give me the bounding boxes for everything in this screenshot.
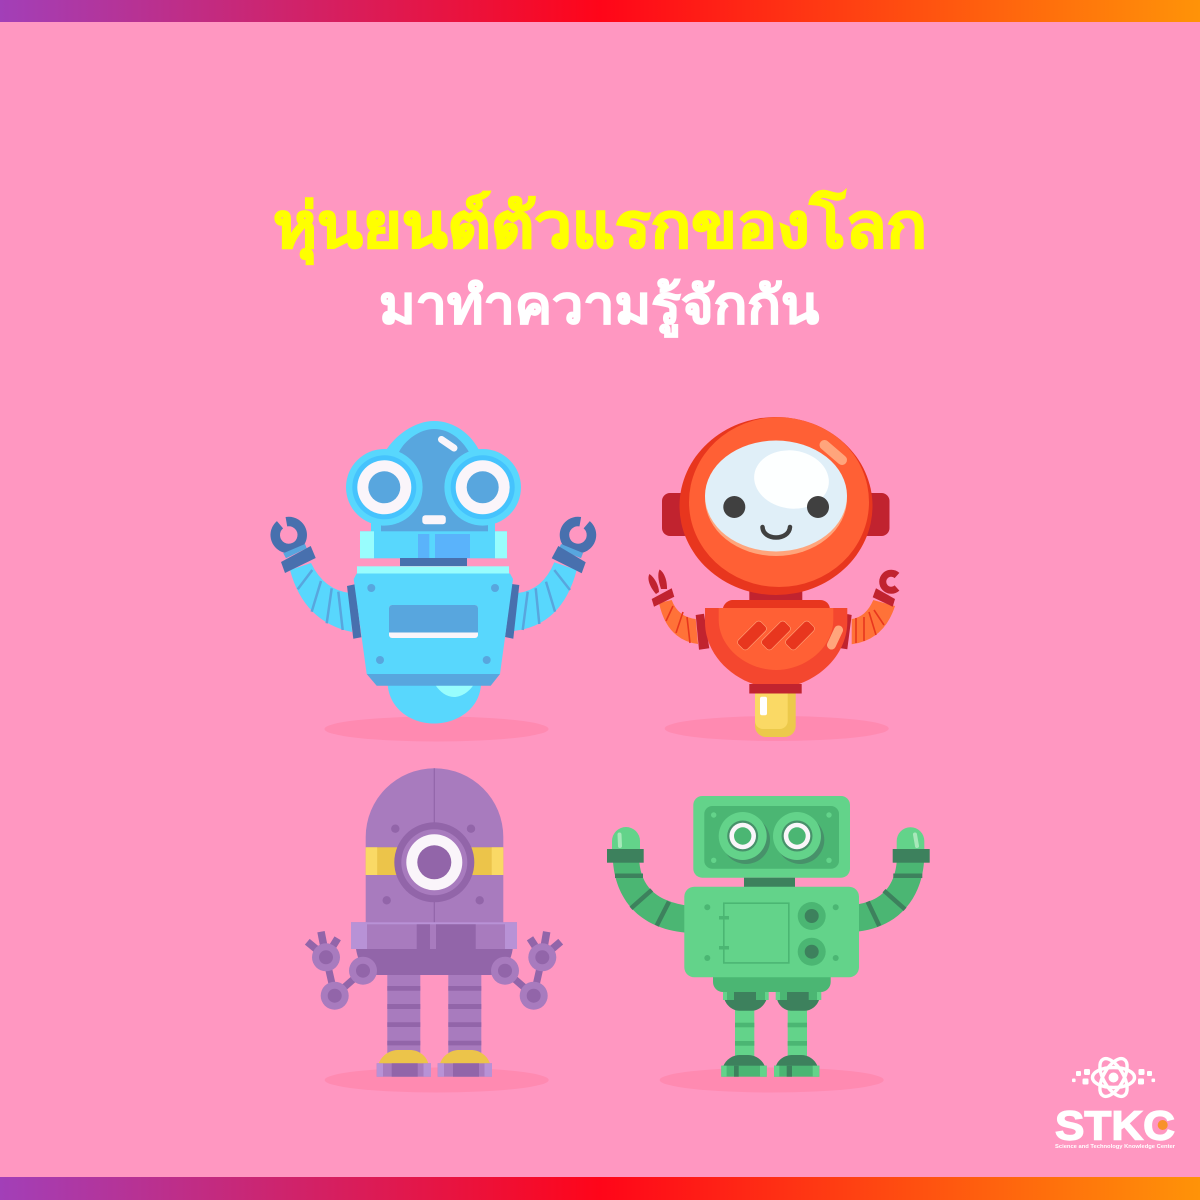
left arm <box>607 827 690 933</box>
collar <box>360 531 507 558</box>
logo orange dot <box>1158 1120 1168 1130</box>
logo tagline: Science and Technology Knowledge Center <box>1055 1144 1176 1150</box>
left leg <box>387 975 420 1053</box>
title line 2: มาทำความรู้จักกัน <box>379 277 819 338</box>
torso <box>705 600 847 694</box>
eyes <box>723 496 829 518</box>
right arm and claw <box>491 932 561 1010</box>
ground shadow <box>665 716 889 741</box>
leg <box>755 693 796 737</box>
ground shadow <box>324 716 548 742</box>
left leg <box>723 992 769 1057</box>
right leg <box>448 975 481 1053</box>
green robot <box>607 796 930 1092</box>
right ear <box>860 493 890 536</box>
head dome <box>371 421 495 532</box>
visor <box>705 440 847 556</box>
right arm <box>505 521 591 639</box>
purple robot <box>307 768 561 1092</box>
logo wordmark: STKC <box>1055 1102 1175 1148</box>
ground shadow <box>325 1068 549 1092</box>
helmet <box>680 417 872 595</box>
right leg <box>776 992 821 1057</box>
STKC logo <box>1055 1054 1176 1150</box>
title line 1: หุ่นยนต์ตัวแรกของโลก <box>273 189 927 264</box>
right shoe <box>438 1050 492 1077</box>
icon: data dots <box>1072 1069 1155 1084</box>
head <box>693 796 850 878</box>
icon: atom <box>1092 1054 1134 1101</box>
right arm <box>841 573 897 649</box>
torso <box>684 887 859 977</box>
red robot <box>648 417 897 741</box>
torso <box>354 566 513 686</box>
ground shadow <box>660 1068 884 1092</box>
left arm and claw <box>307 932 377 1010</box>
left ear <box>662 493 692 536</box>
right eye <box>773 812 824 864</box>
yellow band <box>366 847 503 875</box>
eye <box>394 822 474 902</box>
left eye <box>719 812 770 864</box>
right foot <box>774 1055 819 1077</box>
left shoe <box>377 1050 431 1077</box>
neck <box>749 590 802 602</box>
hips <box>356 949 513 975</box>
right arm <box>853 827 930 932</box>
mouth <box>422 515 446 524</box>
neck <box>400 558 467 566</box>
neck <box>744 878 795 887</box>
title <box>273 189 927 338</box>
bottom gradient bar <box>0 1177 1200 1200</box>
left foot <box>721 1055 767 1077</box>
smile <box>762 527 790 538</box>
left eye <box>346 449 423 526</box>
top gradient bar <box>0 0 1200 22</box>
left arm <box>275 521 361 639</box>
blue robot <box>275 421 591 742</box>
left arm <box>648 570 709 650</box>
right eye <box>444 449 521 526</box>
belt <box>351 922 517 949</box>
head body <box>366 768 503 923</box>
wheel <box>388 685 481 724</box>
hips <box>713 977 831 992</box>
